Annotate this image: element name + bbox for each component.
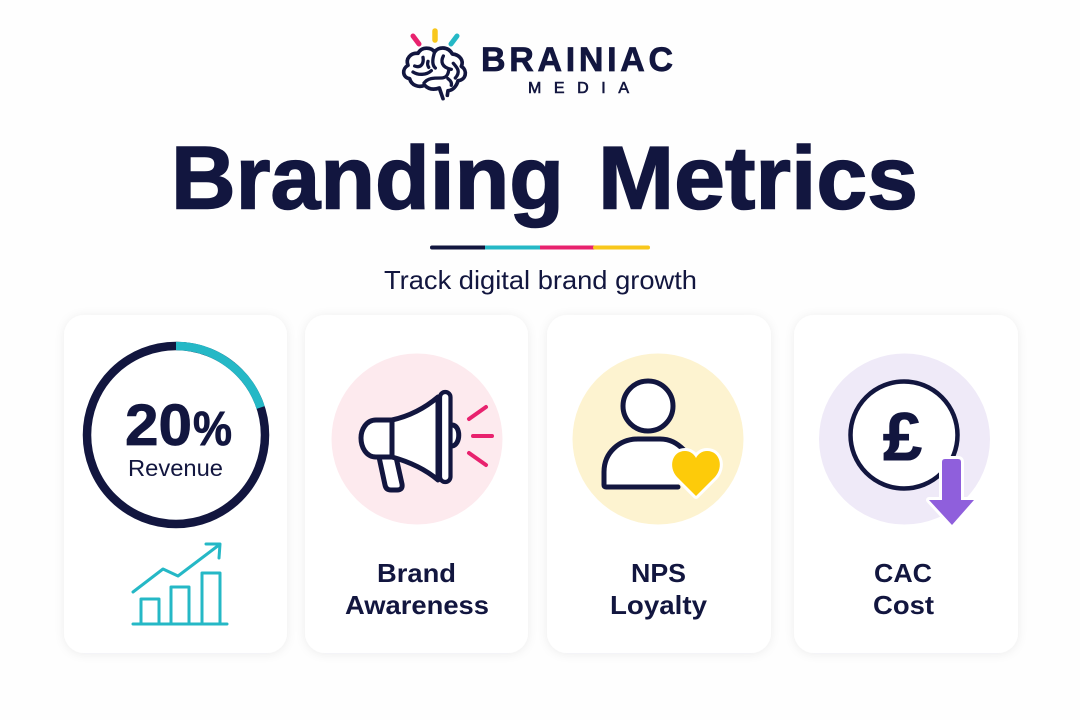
label bbox=[345, 558, 489, 620]
icon: pound coin bbox=[850, 382, 958, 488]
pound sign: £ bbox=[883, 399, 922, 475]
metric value bbox=[125, 393, 232, 458]
subtitle: Track digital brand growth bbox=[384, 265, 697, 295]
label bbox=[610, 558, 708, 620]
title bbox=[171, 128, 918, 228]
icon: growth chart bbox=[133, 544, 227, 624]
panel: revenue bbox=[64, 315, 287, 653]
label: Cost bbox=[873, 590, 934, 620]
title: Metrics bbox=[598, 128, 918, 228]
panel: NPS loyalty bbox=[547, 315, 771, 653]
icon backdrop bbox=[332, 354, 502, 524]
logo subtitle: MEDIA bbox=[528, 80, 629, 97]
label: Awareness bbox=[345, 590, 489, 620]
icon: person with heart bbox=[604, 381, 720, 496]
panel: brand awareness bbox=[305, 315, 528, 653]
icon: megaphone bbox=[361, 392, 492, 490]
title: Branding bbox=[171, 128, 564, 228]
label: Brand bbox=[377, 558, 456, 588]
metric value: % bbox=[193, 403, 232, 456]
label: NPS bbox=[631, 558, 686, 588]
metric value: 20 bbox=[125, 393, 192, 458]
progress ring bbox=[87, 346, 265, 524]
icon: down arrow bbox=[929, 459, 974, 525]
panel: CAC cost bbox=[794, 315, 1018, 653]
icon: heart bbox=[672, 451, 720, 496]
logo bbox=[404, 31, 673, 99]
label: Loyalty bbox=[610, 590, 708, 620]
logo wordmark: BRAINIAC bbox=[481, 41, 673, 79]
label bbox=[873, 558, 934, 620]
icon backdrop bbox=[572, 354, 744, 524]
icon backdrop bbox=[819, 354, 990, 524]
icon: brain with sparks bbox=[404, 31, 465, 99]
divider: four colour segments bbox=[432, 246, 648, 250]
metric label: Revenue bbox=[128, 455, 223, 481]
label: CAC bbox=[874, 558, 932, 588]
